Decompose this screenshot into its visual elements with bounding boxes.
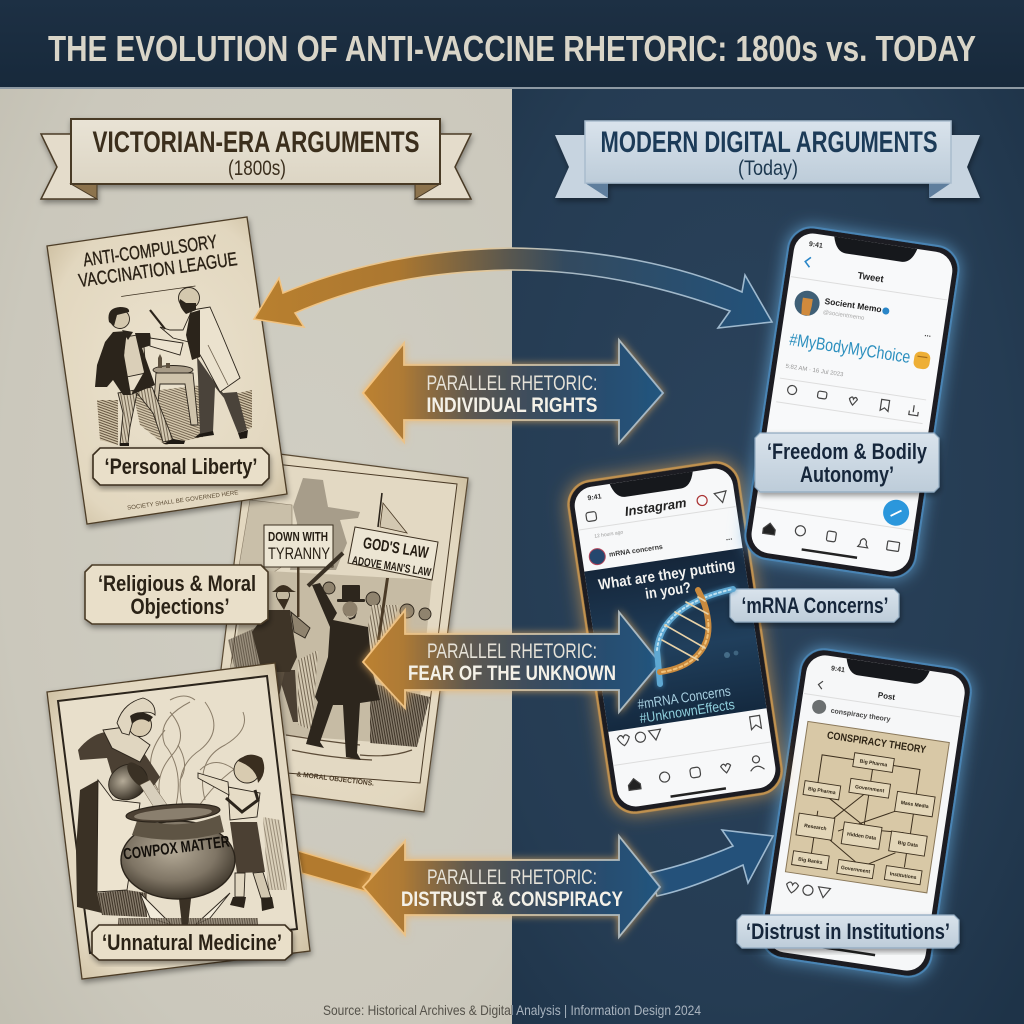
- arrow: curved link from personal liberty to bodily autonomy: [254, 248, 772, 328]
- arrow: parallel rhetoric distrust and conspiracy: [363, 830, 773, 937]
- steam: [150, 696, 245, 812]
- poster small print: SOCIETY SHALL BE GOVERNED HERE: [127, 490, 239, 512]
- hashtag: #MyBodyMyChoice: [788, 329, 912, 367]
- conspiracy chart image: Research: [804, 823, 827, 832]
- conspiracy chart image: Big Banks: [798, 857, 823, 866]
- compose button: [881, 498, 911, 528]
- panel: Victorian background: [0, 88, 512, 1024]
- arrow: parallel rhetoric individual rights: [363, 340, 663, 443]
- phone: conspiracy post: conspiracy theory: [830, 708, 891, 724]
- banner heading: VICTORIAN-ERA ARGUMENTS: [92, 126, 420, 159]
- source footer: Source: Historical Archives & Digital Analysis | Information Design 2024: [323, 1002, 701, 1018]
- dark image panel: [584, 548, 767, 732]
- phone: tweet: Socient Memo: [824, 296, 882, 314]
- phone: conspiracy post: [758, 646, 974, 980]
- plaque: religious and moral objections: [85, 565, 268, 624]
- plaque: unnatural medicine: [92, 925, 292, 960]
- banner subheading: (1800s): [228, 157, 286, 180]
- image hashtags: #mRNA Concerns: [636, 682, 732, 712]
- plaque: religious and moral objections: Objections’: [130, 594, 230, 619]
- conspiracy chart image: Big Pharma: [808, 786, 836, 796]
- bottom navigation: [627, 755, 765, 790]
- conspiracy chart image: Big Pharma: [859, 759, 888, 769]
- poster: anti-compulsory vaccination league: [47, 217, 287, 524]
- man with top hat: [306, 553, 380, 760]
- arrow: parallel rhetoric individual rights: INDIVIDUAL RIGHTS: [426, 394, 598, 417]
- syringe: [150, 310, 165, 329]
- phone: tweet: [742, 224, 962, 581]
- arrow: parallel rhetoric individual rights: PARALLEL RHETORIC:: [426, 372, 598, 395]
- protest sign: God's law: GOD'S LAW: [362, 535, 430, 562]
- phone: mRNA post: mRNA concerns: [609, 544, 663, 559]
- right hatch: [263, 817, 287, 890]
- image hashtags: #UnknownEffects: [638, 696, 736, 726]
- plaque: mRNA concerns: ‘mRNA Concerns’: [742, 593, 888, 618]
- table: [153, 354, 198, 425]
- conspiracy chart image: Institutions: [889, 871, 917, 881]
- post actions: [785, 882, 831, 898]
- man on left: [252, 585, 310, 728]
- plaque: freedom and bodily autonomy: ‘Freedom & Bodily: [767, 439, 928, 464]
- panel: modern background: [512, 88, 1024, 1024]
- background crowd: [228, 570, 432, 745]
- image caption: What are they putting: [597, 556, 736, 594]
- cauldron: COWPOX MATTER: [122, 834, 231, 863]
- banner subheading: (Today): [738, 157, 798, 180]
- conspiracy chart image: Hidden Data: [847, 831, 877, 842]
- phone: mRNA post: 12 hours ago: [594, 530, 624, 540]
- conspiracy chart image: Big Data: [897, 840, 918, 849]
- floor shading: [97, 385, 252, 445]
- boy: [198, 755, 274, 911]
- arrow: parallel rhetoric fear of the unknown: [363, 610, 660, 712]
- conspiracy chart image: Government: [840, 865, 871, 875]
- protest sign: God's law: [348, 493, 438, 640]
- title band: [0, 0, 1024, 89]
- arrow: parallel rhetoric distrust and conspiracy: PARALLEL RHETORIC:: [427, 866, 597, 889]
- woman pouring: [76, 698, 174, 917]
- avatar: [793, 289, 821, 317]
- banner: Victorian-era arguments: [41, 119, 471, 199]
- protest sign: down with tyranny: [264, 525, 333, 617]
- phone: mRNA post: [565, 459, 785, 816]
- banner: modern digital arguments: [555, 121, 980, 198]
- pouring jug: [102, 757, 154, 807]
- phone: tweet: ...: [924, 329, 932, 339]
- plaque: personal liberty: [93, 448, 269, 485]
- distant building: [235, 500, 292, 590]
- poster heading: ANTI-COMPULSORY: [82, 232, 219, 271]
- fist emoji: [913, 351, 931, 370]
- protest sign: God's law: ADOVE MAN'S LAW: [351, 555, 432, 579]
- phone: mRNA post: ...: [725, 532, 733, 542]
- conspiracy chart image: Government: [855, 784, 885, 794]
- conspiracy chart image: [785, 721, 949, 893]
- poster caption: & MORAL OBJECTIONS.: [296, 771, 374, 788]
- doctor: [150, 288, 248, 439]
- plaque: distrust in institutions: [737, 915, 959, 948]
- conspiracy chart image: CONSPIRACY THEORY: [826, 729, 927, 756]
- plaque: personal liberty: ‘Personal Liberty’: [104, 454, 258, 479]
- action icons: [617, 714, 761, 750]
- arrow segment: distrust to unnatural medicine: [298, 851, 372, 891]
- phone: mRNA post: Instagram: [624, 495, 688, 519]
- phone: tweet: 5:82 AM · 16 Jul 2023: [785, 364, 844, 378]
- plaque: distrust in institutions: ‘Distrust in Institutions’: [746, 919, 950, 944]
- poster: unnatural medicine: [47, 663, 310, 979]
- plaque: freedom and bodily autonomy: [755, 433, 939, 492]
- phone: mRNA post: 9:41: [587, 493, 602, 502]
- smoke cloud: [290, 478, 360, 570]
- plaque: freedom and bodily autonomy: Autonomy’: [800, 462, 894, 487]
- plaque: unnatural medicine: ‘Unnatural Medicine’: [102, 930, 282, 955]
- cauldron: [121, 801, 235, 899]
- phone: tweet: 9:41: [808, 241, 823, 250]
- bottom navigation: [763, 520, 900, 553]
- arrow: parallel rhetoric fear of the unknown: FEAR OF THE UNKNOWN: [408, 662, 616, 685]
- woman in striped dress: [370, 683, 430, 747]
- protest sign: down with tyranny: TYRANNY: [268, 544, 330, 563]
- phone: tweet: @socientmemo: [822, 310, 865, 322]
- fire: [118, 890, 258, 927]
- conspiracy chart image: Mass Media: [900, 800, 929, 810]
- phone: conspiracy post: 9:41: [830, 665, 845, 674]
- poster heading: VACCINATION LEAGUE: [77, 249, 239, 292]
- phone: mRNA post: in you?: [644, 579, 692, 603]
- protest sign: down with tyranny: DOWN WITH: [268, 529, 328, 544]
- image hashtags: [636, 682, 736, 726]
- patient: [95, 307, 185, 446]
- plaque: religious and moral objections: ‘Religious & Moral: [98, 571, 256, 596]
- ground strokes: [286, 735, 412, 760]
- phone: tweet: Tweet: [857, 271, 885, 285]
- arrow: parallel rhetoric distrust and conspiracy: DISTRUST & CONSPIRACY: [401, 888, 623, 911]
- poster: religious and moral objections: [207, 450, 468, 812]
- phone: conspiracy post: Post: [877, 691, 896, 702]
- arrow: parallel rhetoric fear of the unknown: PARALLEL RHETORIC:: [427, 640, 597, 663]
- DNA helix: [657, 589, 738, 684]
- plaque: mRNA concerns: [730, 589, 899, 622]
- poster heading: [74, 229, 240, 302]
